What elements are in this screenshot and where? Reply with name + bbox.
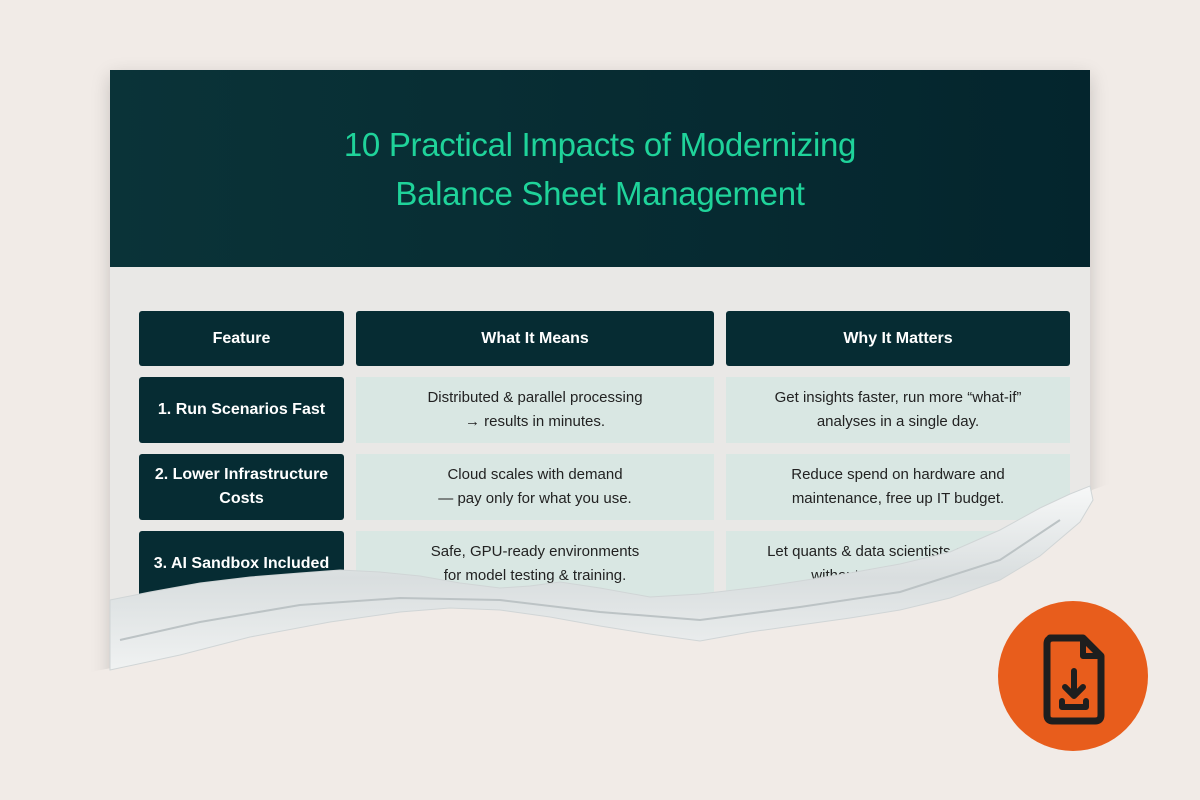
row 3: without risking production.	[811, 567, 985, 584]
title: Balance Sheet Management	[395, 175, 805, 212]
title: 10 Practical Impacts of Modernizing	[344, 126, 856, 163]
row 2: Cloud scales with demand	[447, 466, 623, 483]
row 2: — pay only for what you use.	[438, 490, 632, 507]
header band	[110, 70, 1090, 267]
row 1: Get insights faster, run more “what-if”	[775, 389, 1021, 406]
row 2: 2. Lower Infrastructure	[155, 466, 328, 483]
column header: Feature: Feature	[213, 330, 270, 346]
row 1	[139, 377, 1070, 443]
column header: Feature	[139, 311, 344, 366]
row 3: for model testing & training.	[444, 567, 626, 584]
column header: Why It Matters: Why It Matters	[843, 330, 953, 346]
row 1: Distributed & parallel processing	[427, 389, 643, 406]
row 1: analyses in a single day.	[817, 413, 979, 430]
column header: What It Means	[356, 311, 714, 366]
row 3: Safe, GPU-ready environments	[431, 543, 639, 560]
row 3: Let quants & data scientists experiment	[767, 543, 1029, 560]
row 3: 3. AI Sandbox Included	[154, 555, 329, 572]
row 2: Costs	[219, 490, 264, 507]
card	[110, 70, 1090, 690]
row 1: → results in minutes.	[465, 413, 605, 430]
row 3	[139, 531, 1029, 596]
column header: Why It Matters	[726, 311, 1070, 366]
row 2: Reduce spend on hardware and	[791, 466, 1005, 483]
row 2	[139, 454, 1070, 520]
row 1: 1. Run Scenarios Fast	[158, 401, 325, 418]
icon: download document	[998, 601, 1148, 751]
column header: What It Means: What It Means	[481, 330, 589, 346]
title	[344, 126, 856, 212]
row 2: maintenance, free up IT budget.	[792, 490, 1004, 507]
row 4 feature stub	[139, 608, 344, 674]
